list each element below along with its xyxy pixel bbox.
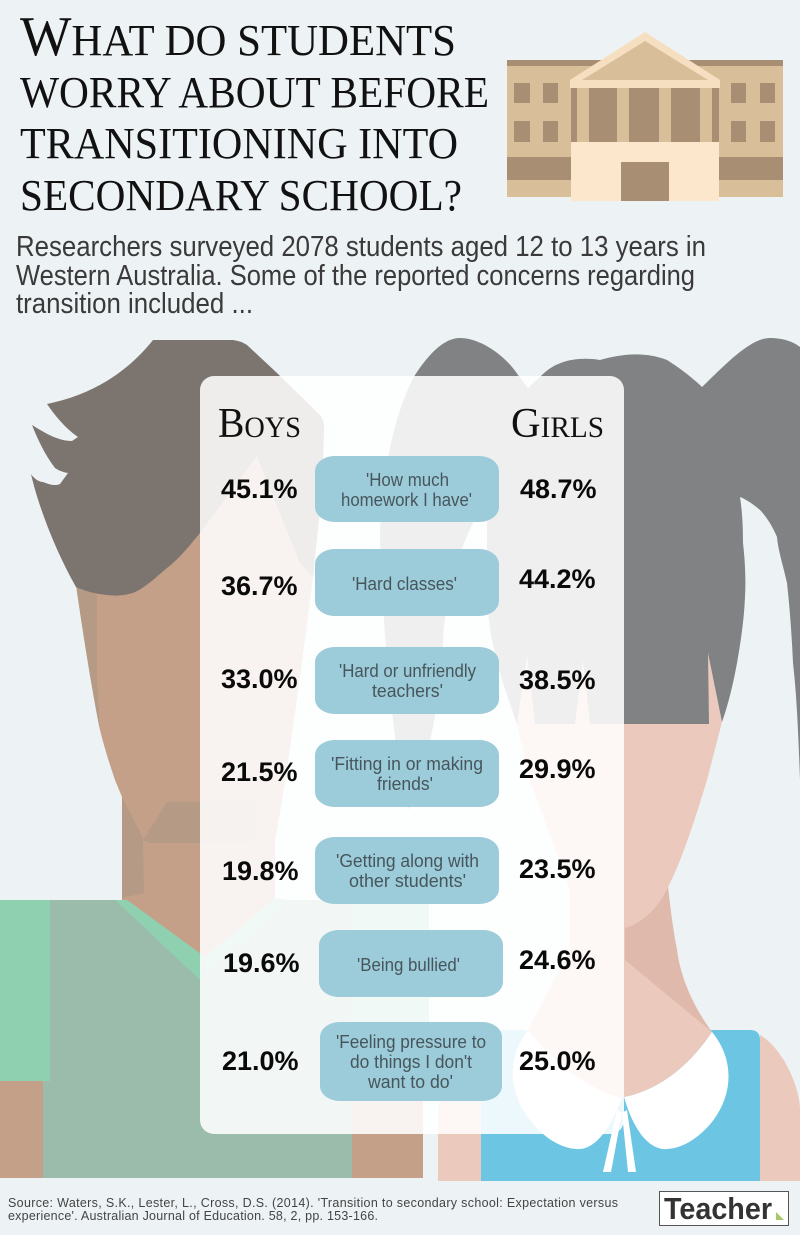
icon: school building	[507, 32, 783, 201]
intro text: Western Australia. Some of the reported concerns regarding	[16, 260, 695, 292]
row: being bullied: 'Being bullied'	[357, 955, 460, 975]
row: fitting in: 21.5%	[221, 757, 298, 787]
row: being bullied	[223, 930, 596, 997]
illustration: boy	[0, 340, 429, 1178]
row: unfriendly teachers	[221, 647, 596, 714]
row: fitting in: 29.9%	[519, 754, 596, 784]
girl hair	[380, 338, 800, 810]
row: homework: 'How much	[366, 470, 449, 490]
logo: Teacher: Teacher	[664, 1191, 772, 1226]
row: homework	[221, 456, 597, 522]
row: getting along	[222, 837, 596, 904]
row: hard classes	[221, 549, 596, 616]
row: feeling pressure: 21.0%	[222, 1046, 299, 1076]
row: homework: 48.7%	[520, 474, 597, 504]
row: feeling pressure	[222, 1022, 596, 1101]
row: fitting in	[221, 740, 596, 807]
row: feeling pressure: do things I don't	[350, 1052, 472, 1072]
title: SECONDARY SCHOOL?	[20, 171, 462, 220]
boy shirt	[0, 898, 429, 1178]
illustration: girl	[380, 338, 800, 1181]
row: feeling pressure: 25.0%	[519, 1046, 596, 1076]
panel: comparison table background	[200, 376, 624, 1134]
row: hard classes: 44.2%	[519, 564, 596, 594]
intro text: Researchers surveyed 2078 students aged 12 to 13 years in	[16, 231, 706, 263]
intro text	[16, 231, 706, 320]
row: unfriendly teachers: teachers'	[372, 681, 443, 701]
source text	[8, 1196, 618, 1223]
source text: experience'. Australian Journal of Education. 58, 2, pp. 153-166.	[8, 1209, 378, 1223]
row: feeling pressure: want to do'	[367, 1072, 453, 1092]
row: feeling pressure: 'Feeling pressure to	[336, 1032, 486, 1052]
row: unfriendly teachers: 'Hard or unfriendly	[339, 661, 476, 681]
row: getting along: 19.8%	[222, 856, 299, 886]
row: fitting in: friends'	[377, 774, 433, 794]
boy hair	[31, 340, 324, 596]
row: hard classes: 'Hard classes'	[352, 574, 457, 594]
row: homework: homework I have'	[341, 490, 472, 510]
row: homework: 45.1%	[221, 474, 298, 504]
row: fitting in: 'Fitting in or making	[331, 754, 483, 774]
row: getting along: 23.5%	[519, 854, 596, 884]
row: getting along: 'Getting along with	[336, 851, 479, 871]
title: WORRY ABOUT BEFORE	[20, 68, 489, 117]
title: WHAT DO STUDENTS	[20, 6, 456, 68]
title	[20, 6, 489, 220]
row: getting along: other students'	[349, 871, 466, 891]
heading: girls: GIRLS	[511, 401, 604, 447]
title: TRANSITIONING INTO	[20, 119, 458, 168]
heading: boys: BOYS	[218, 401, 301, 447]
row: unfriendly teachers: 33.0%	[221, 664, 298, 694]
row: hard classes: 36.7%	[221, 571, 298, 601]
source text: Source: Waters, S.K., Lester, L., Cross, D.S. (2014). 'Transition to secondary school: Expectation versus	[8, 1196, 618, 1210]
row: unfriendly teachers: 38.5%	[519, 665, 596, 695]
row: being bullied: 24.6%	[519, 945, 596, 975]
collar	[513, 1030, 729, 1172]
intro text: transition included ...	[16, 288, 253, 320]
row: being bullied: 19.6%	[223, 948, 300, 978]
